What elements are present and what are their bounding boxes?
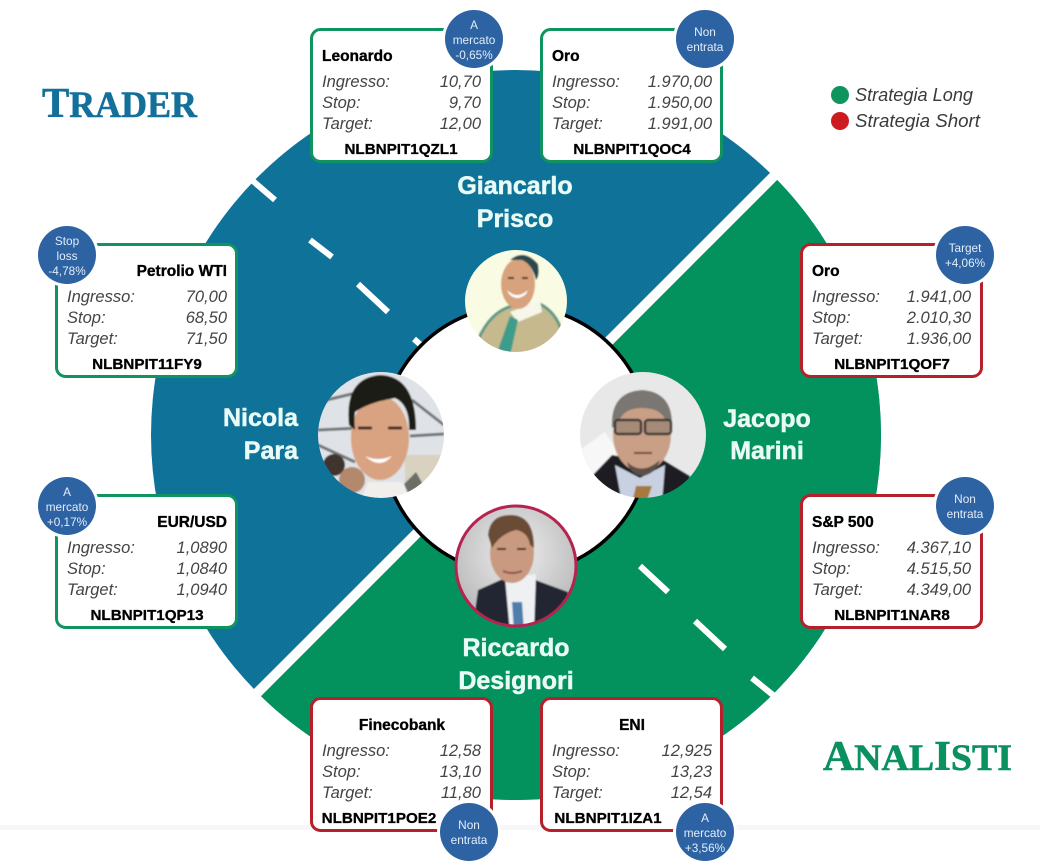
badge: Oro status: Non bbox=[694, 25, 716, 39]
values: 70,00 bbox=[186, 288, 228, 306]
card: Petrolio WTI: Petrolio WTI bbox=[137, 263, 227, 280]
photo: Giancarlo Prisco bbox=[465, 250, 567, 352]
values: Target: bbox=[322, 784, 373, 802]
values: Ingresso: bbox=[812, 288, 880, 306]
values: Target: bbox=[322, 115, 373, 133]
card: Leonardo bbox=[312, 30, 492, 162]
badge: Finecobank status: Non bbox=[458, 818, 480, 832]
card: Finecobank: NLBNPIT1POE2 bbox=[322, 810, 436, 827]
card: EUR/USD bbox=[56, 496, 236, 628]
values: 10,70 bbox=[440, 73, 482, 91]
badge: Oro status bbox=[673, 7, 737, 71]
card: EUR/USD: NLBNPIT1QP13 bbox=[90, 607, 204, 624]
name: Giancarlo Prisco: Giancarlo bbox=[457, 172, 573, 200]
badge: Petrolio status: -4,78% bbox=[48, 264, 86, 278]
badge: EUR/USD status: A bbox=[63, 485, 71, 499]
values: 12,925 bbox=[662, 742, 713, 760]
legend bbox=[831, 85, 981, 131]
values: 4.367,10 bbox=[907, 539, 972, 557]
values: 1.950,00 bbox=[648, 94, 713, 112]
values: 13,23 bbox=[671, 763, 713, 781]
badge: ENI status: +3,56% bbox=[685, 841, 726, 855]
values: Ingresso: bbox=[322, 742, 390, 760]
card: S&P 500: S&P 500 bbox=[812, 514, 874, 531]
badge: Finecobank status: entrata bbox=[451, 833, 488, 847]
values: Stop: bbox=[812, 560, 851, 578]
values: Ingresso: bbox=[552, 73, 620, 91]
photo: Riccardo Designori bbox=[454, 504, 578, 628]
card: EUR/USD: EUR/USD bbox=[157, 514, 227, 531]
values bbox=[67, 288, 228, 348]
name: Nicola Para: Nicola bbox=[223, 404, 299, 432]
card: S&P 500 bbox=[802, 496, 982, 628]
values bbox=[812, 288, 972, 348]
card: ENI bbox=[542, 698, 722, 830]
values bbox=[812, 539, 972, 599]
name: Nicola Para: Para bbox=[244, 437, 299, 465]
values: Target: bbox=[552, 784, 603, 802]
badge: EUR/USD status bbox=[35, 474, 99, 538]
values: 9,70 bbox=[449, 94, 482, 112]
badge: Finecobank status bbox=[437, 800, 501, 863]
photo: Nicola Para bbox=[318, 372, 444, 498]
badge: EUR/USD status: mercato bbox=[46, 500, 89, 514]
values: 1,0840 bbox=[177, 560, 228, 578]
badge: S&P 500 status bbox=[933, 474, 997, 538]
values: 13,10 bbox=[440, 763, 482, 781]
card: Oro trader: NLBNPIT1QOC4 bbox=[573, 141, 691, 158]
values bbox=[67, 539, 228, 599]
badge: EUR/USD status: +0,17% bbox=[47, 515, 88, 529]
badge: S&P 500 status: Non bbox=[954, 492, 976, 506]
card: Finecobank: Finecobank bbox=[359, 717, 445, 734]
badge: Leonardo status: A bbox=[470, 18, 478, 32]
card: Leonardo: NLBNPIT1QZL1 bbox=[344, 141, 458, 158]
card: Petrolio WTI bbox=[56, 244, 236, 376]
card: ENI: ENI bbox=[619, 717, 645, 734]
badge: ENI status bbox=[673, 800, 737, 863]
values: Stop: bbox=[322, 94, 361, 112]
values: Ingresso: bbox=[67, 288, 135, 306]
heading: Analisti: ANALISTI bbox=[823, 734, 1012, 780]
values: Stop: bbox=[812, 309, 851, 327]
badge: Oro analyst status: +4,06% bbox=[945, 256, 986, 270]
values: Ingresso: bbox=[67, 539, 135, 557]
wheel: trader and analyst sectors bbox=[151, 70, 881, 800]
values: Ingresso: bbox=[812, 539, 880, 557]
badge: Leonardo status: mercato bbox=[453, 33, 496, 47]
photo: Jacopo Marini bbox=[580, 372, 706, 498]
values: Stop: bbox=[67, 309, 106, 327]
values: 12,58 bbox=[440, 742, 482, 760]
heading: Trader: TRADER bbox=[42, 81, 198, 127]
values: Target: bbox=[552, 115, 603, 133]
card: Leonardo: Leonardo bbox=[322, 48, 393, 65]
badge: Petrolio status bbox=[35, 223, 99, 287]
values: 1,0940 bbox=[177, 581, 228, 599]
values: 1.936,00 bbox=[907, 330, 972, 348]
badge: Oro status: entrata bbox=[687, 40, 724, 54]
badge: S&P 500 status: entrata bbox=[947, 507, 984, 521]
values: 71,50 bbox=[186, 330, 228, 348]
values: 11,80 bbox=[441, 784, 482, 802]
card: Finecobank bbox=[312, 698, 492, 830]
values bbox=[322, 742, 482, 802]
values: 1,0890 bbox=[177, 539, 228, 557]
name: Riccardo Designori: Designori bbox=[458, 667, 574, 695]
badge: Oro analyst status bbox=[933, 223, 997, 287]
badge: ENI status: mercato bbox=[684, 826, 727, 840]
legend: Strategia Short bbox=[855, 111, 981, 131]
values: 4.515,50 bbox=[907, 560, 972, 578]
values: Target: bbox=[812, 581, 863, 599]
card: Oro analyst: NLBNPIT1QOF7 bbox=[834, 356, 950, 373]
values bbox=[322, 73, 482, 133]
card: S&P 500: NLBNPIT1NAR8 bbox=[834, 607, 950, 624]
legend: Strategia Long bbox=[855, 85, 973, 105]
card: Oro analyst bbox=[802, 244, 982, 376]
values: 12,54 bbox=[671, 784, 712, 802]
card: Petrolio WTI: NLBNPIT11FY9 bbox=[92, 356, 202, 373]
values: Target: bbox=[67, 330, 118, 348]
name: Jacopo Marini: Jacopo bbox=[723, 405, 811, 433]
badge: Leonardo status: -0,65% bbox=[455, 48, 493, 62]
values: Stop: bbox=[552, 94, 591, 112]
values: Stop: bbox=[67, 560, 106, 578]
name: Jacopo Marini: Marini bbox=[730, 437, 804, 465]
values: Ingresso: bbox=[552, 742, 620, 760]
values bbox=[552, 742, 713, 802]
card: Oro trader bbox=[542, 30, 722, 162]
values: Stop: bbox=[322, 763, 361, 781]
badge: Oro analyst status: Target bbox=[949, 241, 982, 255]
badge: Petrolio status: loss bbox=[57, 249, 78, 263]
values: 1.970,00 bbox=[648, 73, 713, 91]
name: Giancarlo Prisco: Prisco bbox=[477, 205, 553, 233]
values: 12,00 bbox=[440, 115, 482, 133]
values bbox=[552, 73, 713, 133]
values: 4.349,00 bbox=[907, 581, 972, 599]
card: ENI: NLBNPIT1IZA1 bbox=[554, 810, 662, 827]
values: 2.010,30 bbox=[906, 309, 972, 327]
name: Riccardo Designori: Riccardo bbox=[463, 634, 569, 662]
values: 68,50 bbox=[186, 309, 228, 327]
values: Target: bbox=[812, 330, 863, 348]
values: Target: bbox=[67, 581, 118, 599]
badge: ENI status: A bbox=[701, 811, 709, 825]
badge: Leonardo status bbox=[442, 7, 506, 71]
values: Ingresso: bbox=[322, 73, 390, 91]
values: 1.941,00 bbox=[907, 288, 972, 306]
card: Oro trader: Oro bbox=[552, 48, 580, 65]
badge: Petrolio status: Stop bbox=[55, 234, 80, 248]
card: Oro analyst: Oro bbox=[812, 263, 840, 280]
values: 1.991,00 bbox=[648, 115, 713, 133]
values: Stop: bbox=[552, 763, 591, 781]
